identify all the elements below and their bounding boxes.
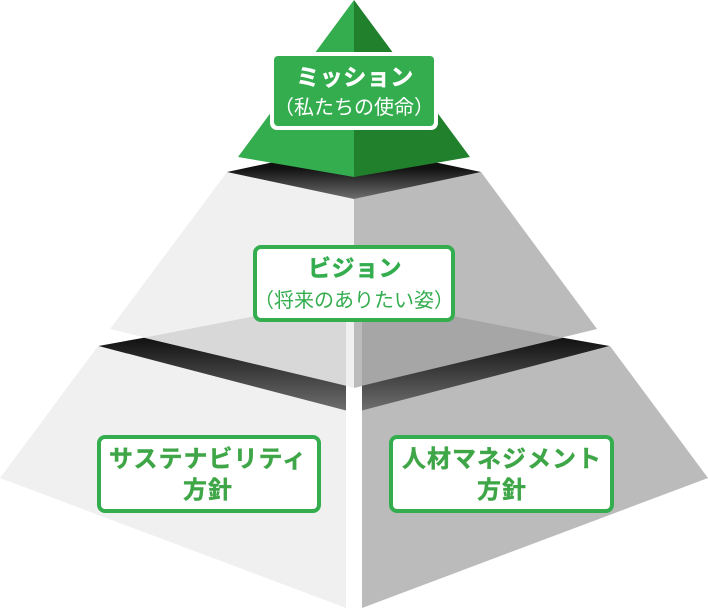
- lower tier: left face: [0, 346, 346, 608]
- label: mission: （私たちの使命）: [274, 96, 434, 119]
- label: mission: ミッション: [296, 64, 414, 90]
- shadow under middle tier, left: [98, 338, 346, 410]
- label: HR management policy: 方針: [477, 477, 527, 504]
- label: sustainability policy: 方針: [183, 477, 233, 504]
- shadow under top tier: [227, 145, 481, 199]
- label: vision: [254, 247, 454, 320]
- top tier: green pyramid: [238, 0, 470, 177]
- label: vision: （将来のありたい姿）: [254, 289, 454, 312]
- label: sustainability policy: サステナビリティ: [109, 446, 307, 473]
- label: vision: ビジョン: [308, 255, 402, 281]
- lower tier: right face: [362, 346, 708, 608]
- middle tier: [110, 172, 597, 388]
- overlay: top face of lower tier, right: [362, 298, 563, 386]
- overlay: top face of lower tier, left: [144, 298, 346, 386]
- shadow under middle tier, right: [362, 338, 610, 410]
- label: sustainability policy: [99, 437, 319, 511]
- label: HR management policy: 人材マネジメント: [402, 446, 602, 473]
- label: mission: [270, 52, 438, 130]
- label: HR management policy: [391, 437, 612, 511]
